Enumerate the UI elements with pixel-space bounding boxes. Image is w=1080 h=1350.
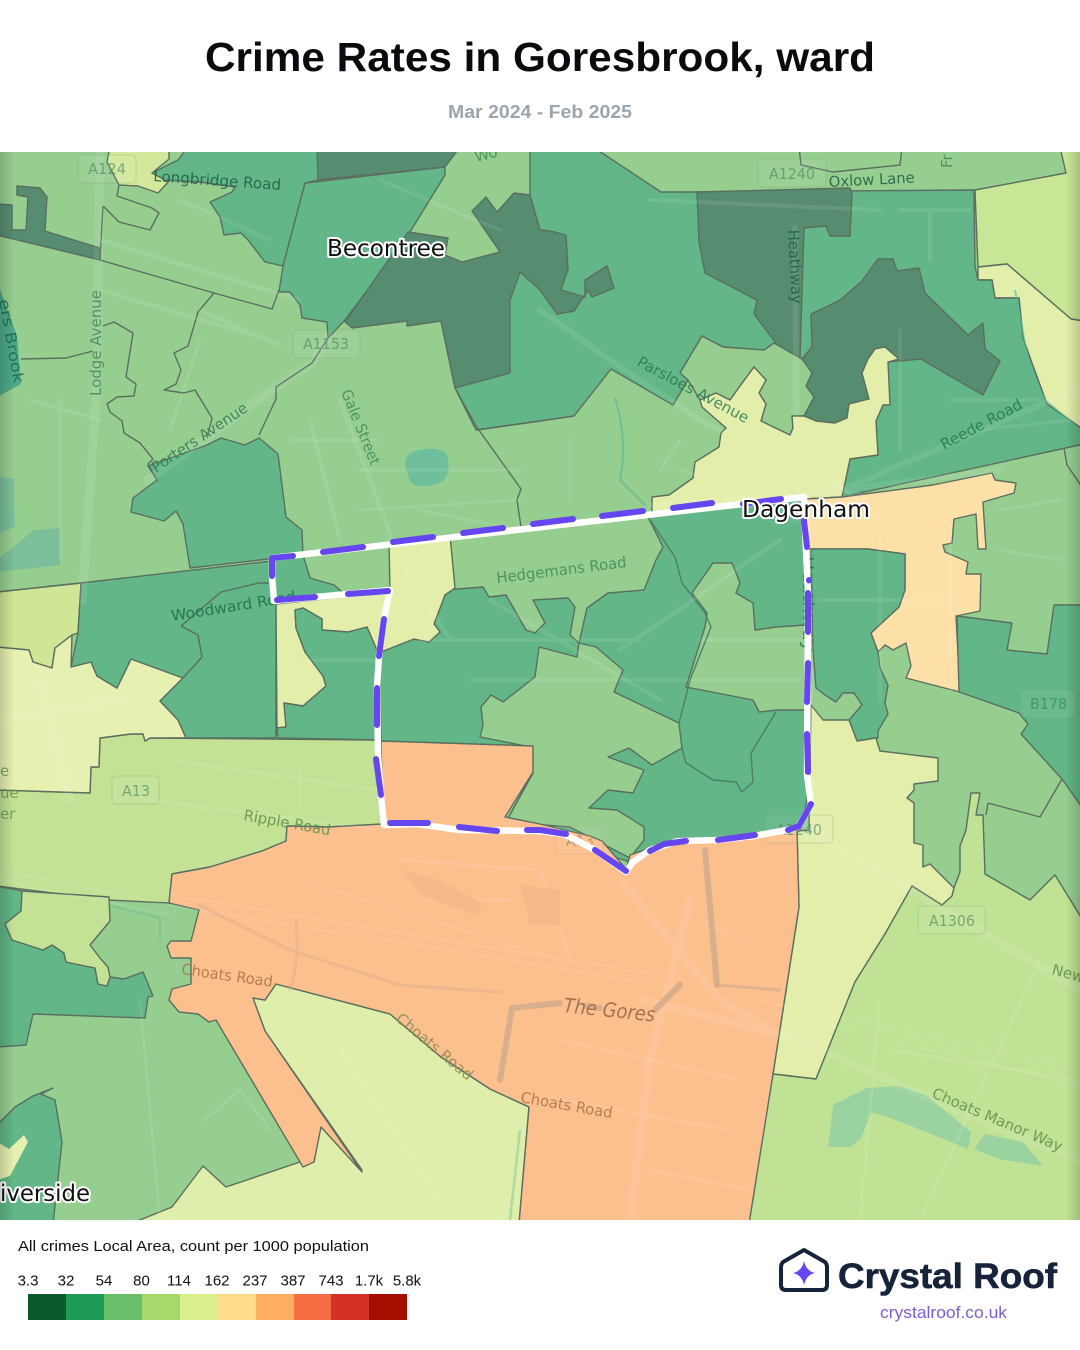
- legend scale labels: 32: [58, 1272, 74, 1290]
- logo wordmark: Crystal Roof: [838, 1257, 1057, 1296]
- website url: crystalroof.co.uk: [880, 1304, 1008, 1322]
- legend scale labels: [18, 1272, 422, 1290]
- area: Riverside pale pocket: [0, 1135, 28, 1180]
- road labels: Reede Road: [937, 395, 1025, 454]
- area: south east pale: [773, 705, 954, 1079]
- road labels: Choats Road: [180, 960, 274, 991]
- road labels: [0, 143, 1080, 1155]
- road labels: Longbridge Road: [153, 167, 282, 194]
- area: ward central medium: [376, 497, 808, 862]
- road shield: A13 centre: [556, 826, 603, 854]
- road labels: Oxlow Lane: [828, 169, 915, 191]
- road shield: A124: [78, 155, 136, 183]
- place label: The Gores: The Gores: [562, 993, 656, 1027]
- subtitle: date range: Mar 2024 - Feb 2025: [448, 101, 632, 122]
- area: Becontree medium: [279, 167, 445, 338]
- area: north west dark strip: [0, 186, 100, 260]
- road labels: Gale Street: [337, 387, 384, 468]
- area: west pale lower: [0, 635, 186, 793]
- area: Longbridge medium: [152, 147, 320, 266]
- area: B178 medium: [957, 605, 1080, 810]
- road labels: Hedgemans Road: [495, 553, 628, 587]
- area: Porters medium: [131, 438, 303, 568]
- area: ward light pocket east: [686, 563, 806, 712]
- legend: [18, 1238, 422, 1320]
- area: ward pale west: [276, 592, 388, 728]
- road shield: A13 west: A13: [122, 782, 150, 800]
- ward outline: Goresbrook: [272, 497, 811, 872]
- road labels: ue: [0, 784, 19, 802]
- road shield: A1306: A1306: [929, 912, 975, 930]
- road labels: Ripple Road: [242, 806, 332, 839]
- area: west pale upper: [0, 583, 81, 668]
- road labels: Choats Manor Way: [929, 1084, 1065, 1155]
- road shield: A13 centre: A13: [566, 832, 594, 850]
- legend scale labels: 162: [204, 1272, 230, 1290]
- place label: Riverside: iverside: [0, 1181, 90, 1207]
- area: A124 pale: [106, 152, 170, 194]
- road labels: Choats Road: [519, 1088, 614, 1122]
- legend title: All crimes Local Area, count per 1000 population: [18, 1238, 369, 1255]
- road labels: Lodge Avenue: [87, 290, 105, 396]
- legend scale labels: 114: [167, 1272, 191, 1290]
- title: Crime Rates in Goresbrook, ward: [205, 34, 875, 80]
- road shield: B178: [1020, 690, 1076, 718]
- road labels: Heathway: [784, 229, 806, 304]
- area: south west dark medium: [0, 886, 153, 1047]
- logo: Crystal Roof: [781, 1250, 1057, 1322]
- area: south east lime: [748, 793, 1080, 1224]
- place label: Becontree: Becontree: [327, 236, 445, 262]
- area: east dark: [802, 259, 1000, 423]
- area: Parsloes light: [680, 336, 814, 435]
- legend scale labels: 387: [280, 1272, 306, 1290]
- area: top right lime: [975, 147, 1080, 321]
- road labels: e: [0, 762, 9, 780]
- area: south pale lime: [130, 984, 529, 1224]
- road labels: Heathway: [799, 556, 817, 652]
- legend scale labels: 5.8k: [393, 1272, 422, 1290]
- area: Woodward medium: [71, 555, 348, 738]
- road shield: A1306: [918, 906, 985, 934]
- road labels: Parsloes Avenue: [634, 353, 752, 427]
- legend scale labels: 237: [242, 1272, 268, 1290]
- legend scale labels: 743: [318, 1272, 344, 1290]
- road labels: Fr: [938, 153, 956, 168]
- area: top dark strip: [316, 152, 457, 181]
- legend scale labels: 3.3: [18, 1272, 38, 1290]
- legend scale labels: 1.7k: [355, 1272, 384, 1290]
- area: ward pale block: [381, 535, 455, 652]
- dark road details on The Gores: [199, 850, 780, 1080]
- legend scale labels: 80: [133, 1272, 150, 1290]
- road shield: A1153: [293, 330, 360, 358]
- legend scale labels: 54: [96, 1272, 112, 1290]
- road shield: A13 west: [112, 776, 159, 804]
- road labels: er: [0, 805, 16, 823]
- road labels: Porters Avenue: [148, 399, 251, 476]
- area: Heathway dark: [697, 188, 852, 364]
- area: Becontree dark: [345, 193, 614, 388]
- area: ward light pocket south: [480, 643, 682, 858]
- legend colour bar: [28, 1294, 407, 1320]
- area: ward west medium: [277, 608, 381, 740]
- icon: house with star: [781, 1250, 827, 1290]
- area: east of ward medium: [811, 549, 905, 741]
- area: south west lime island: [5, 891, 110, 986]
- area: north east pale: [978, 264, 1080, 430]
- area: Dagenham centre pale orange: [805, 473, 1016, 692]
- area: Gores orange: [167, 741, 799, 1224]
- road shield: A1240 north: [758, 159, 826, 187]
- area: A13 lime: [0, 734, 383, 903]
- road shield: A1240 south: [765, 815, 833, 843]
- area: Riverside medium: [0, 1088, 62, 1224]
- road labels: Choats Road: [392, 1009, 477, 1084]
- road shield: B178: B178: [1030, 695, 1067, 713]
- ward boundaries: [0, 147, 1080, 817]
- road network: [0, 152, 1080, 1220]
- road labels: Wo: [473, 143, 499, 166]
- road shield: A124: A124: [88, 160, 126, 178]
- road shield: A1240 north: A1240: [769, 165, 815, 183]
- road shield: A1240 south: A1240: [776, 821, 822, 839]
- place label: Dagenham: Dagenham: [742, 497, 870, 523]
- area: north centre medium: [441, 147, 1080, 497]
- road shield: A1153: A1153: [303, 335, 349, 353]
- road labels: Woodward Road: [170, 587, 297, 625]
- area: Dagenham north pale: [652, 347, 899, 514]
- water features: [0, 281, 1075, 1220]
